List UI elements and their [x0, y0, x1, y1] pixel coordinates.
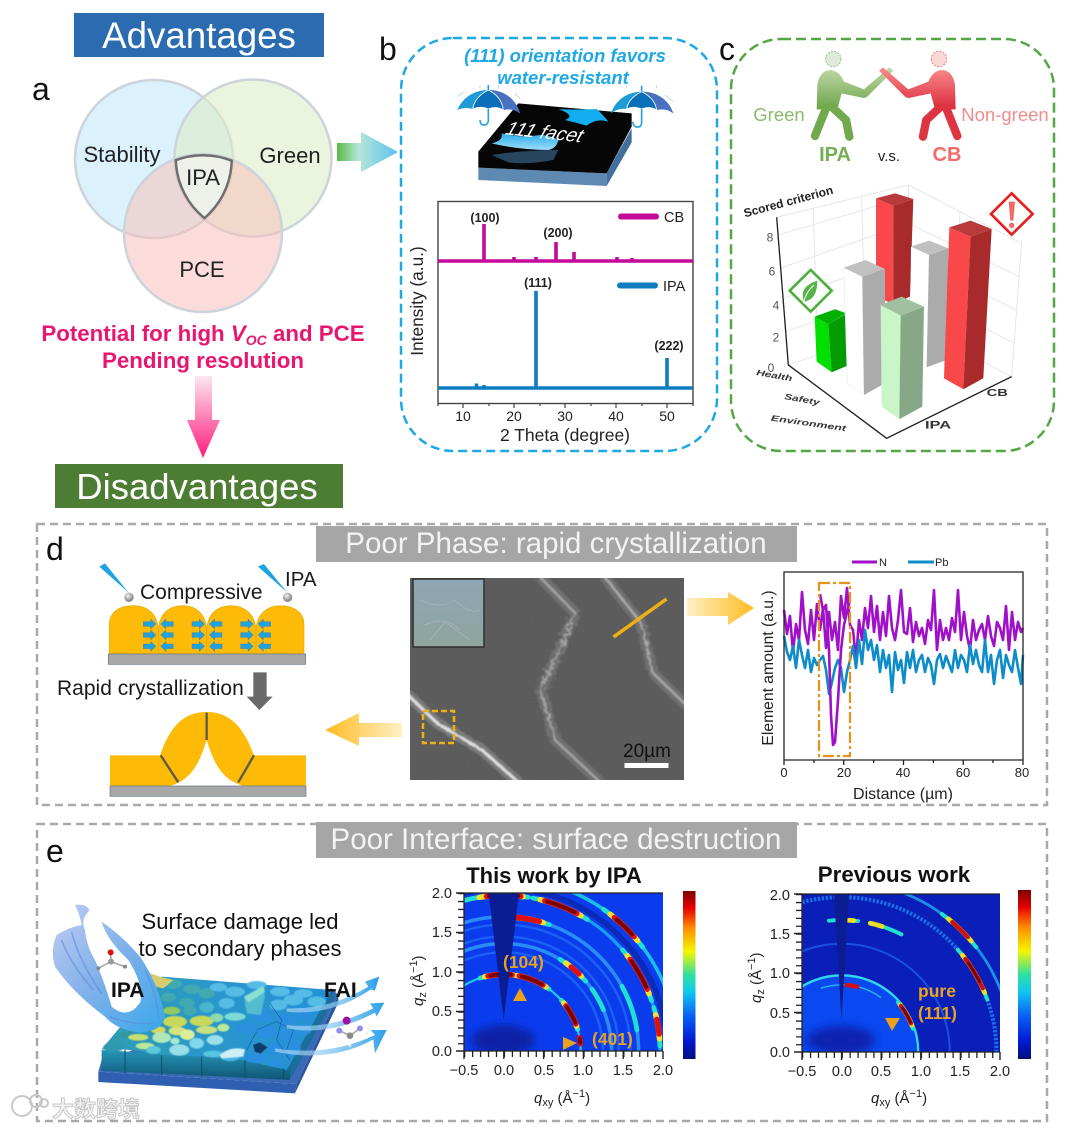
axis tick labels: 2: [773, 330, 780, 344]
axis titles: (Å: [748, 970, 765, 989]
text labels e: [111, 909, 357, 1002]
tick labels: 1.5: [432, 925, 452, 941]
arrow: green to blue pointing right: [337, 132, 398, 172]
top substrate: [108, 654, 306, 664]
yellow wash: [143, 970, 173, 988]
chart: GIWAXS this work: [410, 867, 696, 1108]
venn labels: Stability: [83, 142, 161, 167]
heading: Disadvantages: Disadvantages: [76, 466, 318, 507]
annotations: (104): [503, 952, 544, 972]
axes labels and ticks: 40: [608, 408, 624, 424]
text labels d: Rapid crystallization: [57, 677, 244, 700]
crack lines and hole: [247, 1003, 293, 1060]
legend: N: [879, 557, 887, 569]
axes labels and ticks: 10: [455, 408, 471, 424]
legend: Pb: [935, 557, 948, 569]
text: potential and pending resolution: and PCE: [267, 321, 365, 346]
substrate: [98, 988, 338, 1093]
arrow: yellow left: [325, 713, 402, 746]
heading: poor interface: Poor Interface: surface destruction: [331, 823, 781, 856]
tick labels: −0.5: [450, 1063, 478, 1079]
illustration: perovskite film surface: [98, 977, 338, 1093]
text: orientation heading: (111) orientation favors: [464, 45, 666, 66]
venn centre: IPA overlap: [174, 154, 233, 220]
bar: CB safety grey: [910, 241, 948, 367]
text labels d: IPA: [285, 568, 317, 591]
text: potential and pending resolution: [41, 321, 365, 373]
icon: warning diamond: [991, 193, 1033, 235]
panel letter d: d: [46, 531, 64, 567]
axes labels and ticks: Intensity (a.u.): [407, 246, 427, 356]
N dip trace: [820, 594, 850, 745]
legend: [620, 210, 686, 295]
map: [802, 894, 1000, 1052]
watermark: 大数跨境: [52, 1097, 140, 1122]
category labels: Safety: [784, 393, 822, 408]
tick labels: 1.0: [770, 966, 790, 982]
bar: IPA environment pale green: [881, 297, 924, 419]
axis titles: (Å: [410, 973, 427, 992]
tick labels: 0.5: [770, 1006, 790, 1022]
tick labels: 2.0: [990, 1064, 1010, 1080]
FAI arrows: [275, 977, 387, 1055]
axis titles: q: [410, 997, 427, 1006]
axes labels and ticks: 2 Theta (degree): [500, 425, 630, 445]
colorbar: [1018, 890, 1031, 1059]
arrow: pink downward: [187, 376, 220, 458]
venn labels: PCE: [179, 257, 225, 282]
category labels: IPA: [925, 419, 951, 432]
axis labels: 80: [1015, 765, 1029, 780]
tick labels: 1.5: [613, 1063, 633, 1079]
bar: CB environment red: [944, 221, 992, 389]
axis titles: xy: [542, 1097, 554, 1109]
tick labels: 0.0: [770, 1045, 790, 1061]
figure: IPA person: [815, 51, 893, 137]
axis titles: ): [585, 1090, 590, 1107]
category labels: Environment: [770, 414, 847, 434]
bar: CB health red: [876, 193, 913, 304]
front cell dividers: [125, 1049, 283, 1079]
illustration: compressive strain and rapid crystallization: [99, 563, 306, 796]
axes labels and ticks: 20: [506, 408, 522, 424]
axis titles: ): [922, 1090, 927, 1107]
annotations: pure: [918, 981, 956, 1001]
tick labels: 2.0: [770, 888, 790, 904]
colorbar: [683, 891, 696, 1059]
SEM image: [408, 576, 686, 782]
tick labels: −0.5: [788, 1064, 816, 1080]
axis tick labels: 8: [767, 230, 774, 244]
bar: IPA health green: [815, 309, 847, 372]
map: [464, 894, 663, 1050]
text labels e: FAI: [324, 979, 357, 1002]
axis titles: −1: [746, 957, 758, 970]
splash of IPA: [53, 905, 165, 1033]
grain boundaries: [161, 713, 254, 782]
panel letter b: b: [379, 31, 397, 67]
tick labels: 1.0: [432, 965, 452, 981]
labels: Green vs Non-green: [753, 104, 1049, 166]
tick labels: 1.5: [950, 1064, 970, 1080]
text labels e: to secondary phases: [138, 936, 342, 961]
annotations: (111): [918, 1003, 957, 1023]
axis labels: [760, 590, 1029, 803]
frame and ticks: [794, 894, 1000, 1060]
CB trace: [438, 224, 693, 261]
tick labels: 0.0: [494, 1063, 514, 1079]
tick labels: 2.0: [653, 1063, 673, 1079]
venn circles: [75, 80, 332, 312]
axis title: scored criterion: Scored criterion: [742, 183, 835, 220]
arrow: yellow right: [687, 592, 754, 625]
text: potential and pending resolution: Pending resolution: [102, 348, 304, 373]
legend: IPA: [663, 279, 686, 295]
peak labels: (200): [543, 226, 573, 240]
figure: CB person: [879, 51, 957, 137]
axis titles: (Å: [890, 1090, 910, 1107]
grid: [777, 185, 1022, 377]
peak labels: (100): [470, 211, 500, 225]
axes: [777, 217, 1012, 438]
bottom buckled film: [110, 712, 306, 786]
panel d: poor phase: [37, 524, 1047, 805]
axis titles: ): [748, 952, 765, 957]
bottom substrate: [110, 786, 306, 796]
legend: CB: [664, 210, 684, 226]
text: orientation heading: water-resistant: [497, 67, 630, 88]
figures: [815, 51, 957, 137]
axis titles: [746, 952, 927, 1109]
heading: This work by IPA: [466, 863, 642, 888]
plot frame: [438, 202, 693, 404]
labels: Green vs Non-green: IPA: [819, 144, 851, 166]
axis tick labels: 6: [769, 265, 776, 279]
axes labels and ticks: 30: [557, 408, 573, 424]
annotations: [885, 981, 957, 1031]
labels: Green vs Non-green: v.s.: [878, 148, 900, 165]
category labels: CB: [987, 387, 1008, 398]
axis titles: q: [748, 994, 765, 1003]
heading: Previous work: [818, 862, 971, 887]
panel b: XRD and water resistance: [379, 31, 717, 451]
illustration: IPA splash and FAI release: [53, 905, 387, 1055]
molecule: IPA: [96, 949, 127, 970]
chart: GIWAXS previous work: [748, 866, 1031, 1108]
labels: Green vs Non-green: Non-green: [961, 104, 1049, 125]
axis titles: (Å: [553, 1090, 573, 1107]
axes labels and ticks: 50: [659, 408, 675, 424]
annotations: (401): [592, 1029, 633, 1049]
molecule: FAI: [331, 1017, 368, 1047]
panel border e: [37, 824, 1047, 1121]
orange dash-dot highlight: [819, 583, 850, 756]
splash streaks: [62, 932, 158, 1024]
bar: IPA safety white: [844, 260, 885, 395]
chart: XRD patterns: [407, 202, 693, 445]
N trace: [784, 588, 1023, 660]
tick labels: [770, 888, 1010, 1080]
panel c: green solvent comparison: [719, 31, 1054, 451]
tick labels: 0.0: [832, 1064, 852, 1080]
axis labels: 60: [956, 765, 970, 780]
film block: [102, 977, 335, 1080]
axis labels: Element amount (a.u.): [760, 590, 777, 746]
chart: 3D scored criterion bars: [742, 183, 1033, 438]
axis titles: −1: [573, 1088, 585, 1100]
axes labels and ticks: [407, 246, 693, 445]
axis titles: z: [417, 992, 429, 998]
panel border b: [401, 38, 717, 451]
axis titles: ): [410, 955, 427, 960]
axis tick labels: [767, 230, 780, 375]
axis tick labels: 0: [768, 361, 775, 375]
IPA trace: [438, 291, 693, 388]
text labels e: Surface damage led: [142, 909, 338, 934]
grains: [103, 979, 326, 1067]
SEM orange line and dashed box: [423, 599, 666, 743]
axis titles: q: [534, 1090, 543, 1107]
text: potential and pending resolution: Potential for high V: [41, 321, 246, 346]
chart frame and ticks: [784, 572, 1023, 765]
tick labels: 0.5: [871, 1064, 891, 1080]
panel border c: [731, 39, 1054, 451]
tick labels: 0.5: [432, 1004, 452, 1020]
text labels d: [57, 568, 317, 700]
venn labels: IPA: [186, 165, 220, 190]
tick labels: 0.5: [534, 1063, 554, 1079]
panel letter a: a: [32, 71, 50, 107]
arrow: grey down: [247, 672, 273, 710]
text: potential and pending resolution: OC: [246, 332, 268, 348]
axis labels: Distance (µm): [853, 786, 953, 803]
panel letter e: e: [46, 833, 64, 869]
panel e: poor interface: [37, 822, 1047, 1121]
text labels d: Compressive: [140, 581, 263, 604]
axis titles: −1: [408, 960, 420, 973]
frame and ticks: [456, 893, 663, 1059]
venn labels: [83, 142, 321, 282]
peak labels: (111): [524, 276, 552, 290]
illustration: 111 facet slab with umbrellas: [457, 85, 673, 186]
tick labels: 1.0: [573, 1063, 593, 1079]
panel letter c: c: [719, 31, 735, 67]
tick labels: [432, 886, 673, 1079]
illustration: 111 facet slab with umbrellas: 111 facet: [503, 118, 588, 147]
axis tick labels: 4: [773, 298, 780, 312]
axis titles: q: [871, 1090, 880, 1107]
axis labels: 20: [837, 765, 851, 780]
peak labels: (222): [654, 339, 684, 353]
SEM inset photo: [413, 579, 484, 647]
panel border d: [37, 524, 1047, 805]
tick labels: 1.5: [770, 927, 790, 943]
tick labels: 2.0: [432, 886, 452, 902]
venn labels: Green: [259, 143, 321, 168]
axis titles: z: [755, 989, 767, 995]
labels: Green vs Non-green: CB: [933, 144, 961, 166]
category labels: Health: [756, 369, 793, 384]
watermark: [12, 1095, 140, 1122]
top domes: [109, 606, 304, 654]
peak labels: [470, 211, 684, 353]
tick labels: 0.0: [432, 1044, 452, 1060]
heading: Advantages: Advantages: [102, 15, 296, 56]
axis labels: 0: [780, 765, 788, 780]
tick labels: 1.0: [911, 1064, 931, 1080]
annotations: [503, 952, 633, 1050]
axis labels: 40: [896, 765, 910, 780]
SEM scale bar: 20µm: [623, 741, 671, 762]
Pb trace: [784, 630, 1023, 694]
compressive blue arrows: [143, 619, 271, 651]
legend: [852, 557, 948, 569]
labels: Green vs Non-green: Green: [753, 104, 805, 125]
text: orientation heading: [464, 45, 666, 88]
icon: leaf diamond: [790, 270, 832, 312]
chart: element line profile: [760, 557, 1029, 803]
pipettes: [99, 563, 292, 602]
panel a: advantages venn diagram: [32, 13, 398, 508]
text labels e: IPA: [111, 979, 144, 1002]
axis titles: −1: [910, 1088, 922, 1100]
category labels: [756, 369, 1008, 434]
heading: poor phase: Poor Phase: rapid crystallization: [345, 527, 767, 560]
axis titles: [408, 955, 590, 1109]
axis titles: xy: [879, 1097, 891, 1109]
